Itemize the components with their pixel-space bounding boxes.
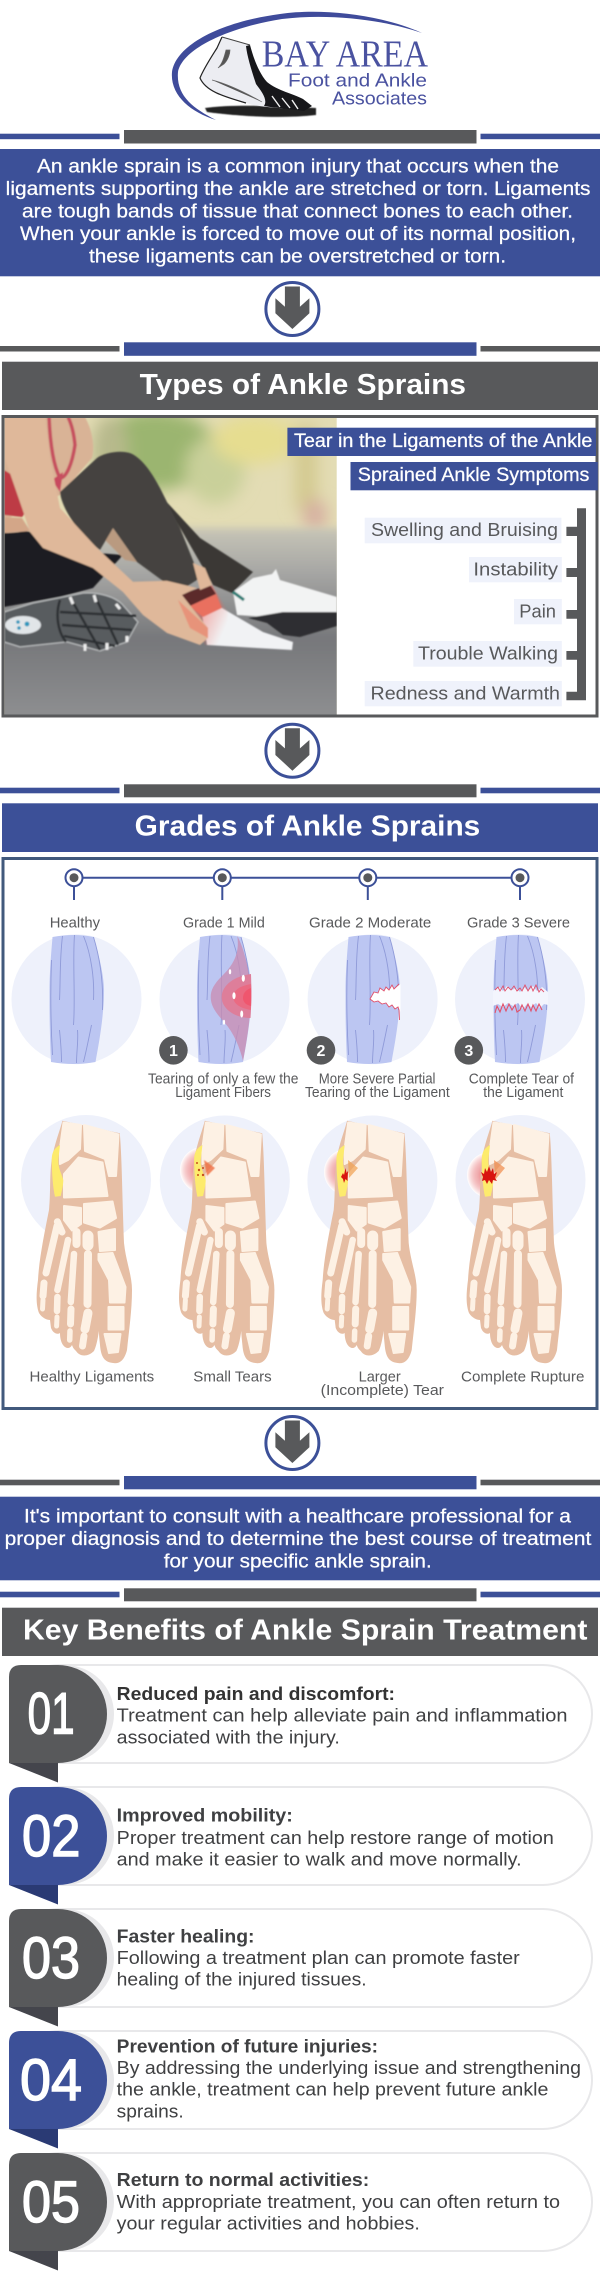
ligament: grade 3 severe: [454, 934, 585, 1065]
card 05 text: With appropriate treatment, you can often return to: [117, 2192, 560, 2212]
divider 4: [0, 1476, 600, 1489]
grade captions: Complete Tear of: [469, 1070, 575, 1087]
intro panel: [0, 149, 600, 276]
card 04 text: [117, 2036, 581, 2121]
badge 1: 1: [169, 1043, 178, 1060]
symptom: trouble walking: Trouble Walking: [418, 642, 558, 664]
card 04 text: Prevention of future injuries:: [117, 2036, 378, 2056]
heading: key benefits: Key Benefits of Ankle Sprain Treatment: [23, 1614, 588, 1646]
card 03 text: Following a treatment plan can promote faster: [117, 1948, 520, 1968]
card 04: [9, 2031, 592, 2148]
back of thigh: [105, 528, 137, 562]
ligament: grade 2 moderate: [307, 934, 438, 1065]
tag: sprained ankle symptoms: [350, 462, 598, 490]
consult text: [5, 1506, 592, 1572]
arrow 2: [266, 724, 319, 777]
panel: symptoms with photo: [0, 410, 598, 728]
arrow 3: [266, 1416, 319, 1470]
card 04 text: By addressing the underlying issue and strengthening: [117, 2058, 581, 2078]
consult panel: [0, 1497, 600, 1580]
card 02 text: Improved mobility:: [117, 1806, 293, 1826]
near shoe: [4, 593, 138, 651]
intro text: [6, 156, 591, 268]
card 03 text: Faster healing:: [117, 1926, 254, 1946]
grade labels: Grade 3 Severe: [467, 914, 570, 931]
foot: complete rupture: [456, 1115, 586, 1363]
card 02: [9, 1787, 592, 1904]
card 03 text: healing of the injured tissues.: [117, 1970, 367, 1990]
logo subtitle line 1: Foot and Ankle: [288, 71, 427, 91]
card 05 text: Return to normal activities:: [117, 2170, 369, 2190]
card 01 text: [117, 1684, 567, 1747]
arm and hand: [9, 473, 208, 646]
logo swoosh: [172, 12, 422, 120]
grade captions: Tearing of only a few the: [148, 1070, 298, 1087]
card 04: 04: [20, 2048, 82, 2113]
grade captions: More Severe Partial: [319, 1070, 436, 1087]
consult text: for your specific ankle sprain.: [164, 1552, 432, 1572]
torso and top: [4, 417, 93, 533]
tag: tear in the ligaments: Tear in the Ligaments of the Ankle: [294, 431, 592, 452]
card 01: 01: [28, 1682, 75, 1746]
logo subtitle line 2: Associates: [332, 88, 427, 108]
bracket: [566, 508, 586, 700]
card 03: [9, 1909, 592, 2026]
symptom: instability: Instability: [473, 558, 559, 580]
grade captions: Ligament Fibers: [175, 1084, 271, 1101]
heading: grades of ankle sprains: [2, 803, 598, 852]
back leg: [163, 498, 253, 593]
foot: larger incomplete tear: [307, 1116, 437, 1363]
intro text: are tough bands of tissue that connect bones to each other.: [22, 202, 573, 222]
intro text: ligaments supporting the ankle are stretched or torn. Ligaments: [6, 179, 591, 200]
divider 1: [0, 130, 600, 144]
grade labels: Grade 2 Moderate: [309, 914, 431, 931]
timeline: [66, 869, 528, 900]
card 01: [9, 1665, 592, 1782]
ligament: grade 1 mild: [159, 934, 290, 1065]
card 05: 05: [22, 2170, 80, 2235]
panel: grades: [3, 858, 597, 1408]
logo: [172, 12, 428, 120]
card 03 text: [117, 1926, 520, 1990]
foot labels: Complete Rupture: [461, 1369, 584, 1386]
symptom: swelling and bruising: Swelling and Bruising: [371, 519, 558, 540]
card 04 text: the ankle, treatment can help prevent future ankle: [117, 2080, 548, 2100]
grade labels: Grade 1 Mild: [183, 914, 265, 931]
grade captions: Tearing of the Ligament: [305, 1084, 450, 1101]
symptom: redness and warmth: Redness and Warmth: [370, 682, 560, 704]
divider 2: [0, 342, 600, 356]
symptom: pain: Pain: [519, 600, 556, 622]
card 02 text: Proper treatment can help restore range of motion: [117, 1828, 554, 1848]
grade captions: [148, 1070, 575, 1101]
card 01 text: associated with the injury.: [117, 1727, 340, 1747]
consult text: proper diagnosis and to determine the best course of treatment: [5, 1529, 592, 1550]
symptom: pain: [514, 599, 562, 624]
consult text: It's important to consult with a healthcare professional for a: [24, 1506, 571, 1528]
card 01 text: Treatment can help alleviate pain and inflammation: [117, 1706, 567, 1726]
foot labels: Healthy Ligaments: [30, 1369, 154, 1386]
card 04 text: sprains.: [117, 2101, 184, 2121]
heading: types of ankle sprains: [2, 362, 598, 410]
grade labels: [50, 914, 570, 931]
sock: [202, 607, 294, 651]
heading: types of ankle sprains: Types of Ankle Sprains: [140, 369, 466, 401]
logo name: BAY AREA: [262, 34, 428, 76]
heading: grades of ankle sprains: Grades of Ankle Sprains: [135, 810, 480, 842]
foot labels: [30, 1369, 584, 1399]
photo: woman holding sprained ankle: [4, 418, 337, 714]
foot: small tears: [160, 1116, 290, 1363]
badge 2: 2: [317, 1043, 326, 1060]
symptom: instability: [469, 557, 562, 582]
intro text: When your ankle is forced to move out of its normal position,: [20, 224, 576, 245]
grade labels: Healthy: [50, 914, 100, 931]
tag: sprained ankle symptoms: Sprained Ankle Symptoms: [358, 465, 589, 486]
card 05: [9, 2153, 592, 2270]
logo foot drawing: [200, 37, 316, 117]
arrow 1: [266, 282, 319, 336]
foot: healthy ligaments: [21, 1115, 151, 1363]
foot labels: Larger: [359, 1369, 401, 1386]
heading: key benefits: [2, 1608, 598, 1656]
intro text: these ligaments can be overstretched or torn.: [89, 246, 506, 268]
card 02: 02: [22, 1804, 80, 1869]
card 02 text: and make it easier to walk and move normally.: [117, 1850, 522, 1870]
foot labels: Small Tears: [193, 1369, 272, 1386]
card 05 text: [117, 2170, 560, 2234]
badge 3: 3: [464, 1043, 473, 1060]
far shoe: [233, 569, 337, 637]
card 01 text: Reduced pain and discomfort:: [117, 1684, 395, 1704]
card 05 text: your regular activities and hobbies.: [117, 2214, 420, 2234]
card 02 text: [117, 1806, 554, 1870]
ligament: healthy: [12, 934, 142, 1064]
lower body: [4, 531, 123, 607]
divider 3: [0, 784, 600, 797]
grade captions: the Ligament: [483, 1084, 564, 1101]
front leg: [60, 452, 200, 592]
divider 5: [0, 1588, 600, 1601]
foot labels: (Incomplete) Tear: [321, 1382, 444, 1399]
intro text: An ankle sprain is a common injury that occurs when the: [37, 156, 559, 178]
tag: tear in the ligaments: [287, 428, 596, 456]
card 03: 03: [22, 1926, 80, 1991]
